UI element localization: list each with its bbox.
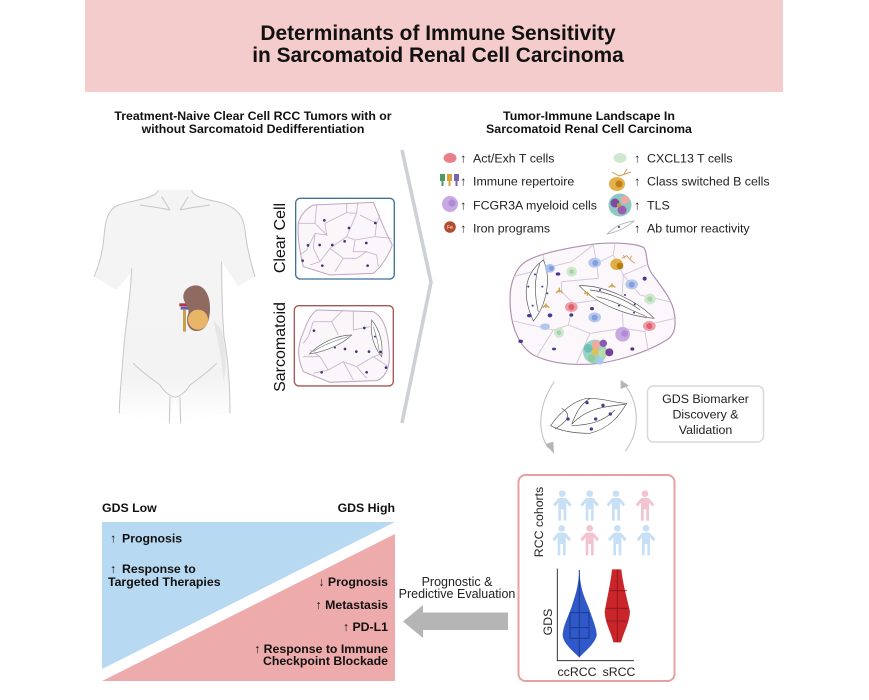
legend item: Ab tumor reactivity: ↑ [634,222,640,236]
legend item: Ab tumor reactivity [607,221,750,236]
legend item: TLS: TLS [647,198,670,212]
legend item: Act/Exh T cells: ↑ [460,152,466,166]
violin plot [557,569,634,661]
label: prognostic and predictive evaluation: Prognostic & [422,575,493,589]
legend: tumor-immune features [440,152,770,236]
spindle cells [526,260,654,321]
wedge: GDS high: ↓ Prognosis [318,575,388,589]
tumor microenvironment illustration [510,243,675,365]
icon: human torso with kidney [94,190,255,423]
legend item: CXCL13 T cells: CXCL13 T cells [647,152,733,166]
wedge: GDS low [102,522,395,669]
legend item: Ab tumor reactivity: Ab tumor reactivity [647,222,750,236]
arrow: left down [541,382,554,454]
panel: sarcomatoid tumor: Sarcomatoid [272,302,289,392]
label: prognostic and predictive evaluation: Predictive Evaluation [399,587,515,601]
legend item: Iron programs: Iron programs [473,222,550,236]
spindle cell cluster [551,398,627,433]
cohort people icons [552,490,655,555]
callout: GDS biomarker discovery [648,386,764,442]
arrow: evaluation to outcomes [403,605,508,638]
chevron divider [402,150,431,423]
callout: GDS biomarker discovery: Discovery & [672,408,739,422]
TLS cluster [583,340,613,365]
wedge: GDS low: ↑ [110,562,116,576]
callout: GDS biomarker discovery: Validation [679,423,732,437]
heading: tumor-immune landscape [486,109,692,136]
legend item: FCGR3A myeloid cells [442,196,597,212]
label: prognostic and predictive evaluation [399,575,515,601]
panel: clear cell tumor [272,198,394,279]
heading: treatment-naive tumors [114,109,392,136]
wedge: GDS high: Checkpoint Blockade [263,654,388,668]
heading: treatment-naive tumors: without Sarcomatoid Dedifferentiation [141,122,364,136]
legend item: Class switched B cells: Class switched B cells [647,174,770,188]
title banner [85,0,783,92]
legend item: Class switched B cells [609,169,770,191]
panel: clear cell tumor: Clear Cell [272,203,289,273]
legend item: TLS: ↑ [634,198,640,212]
GDS low and high outcome wedge: GDS High [338,501,395,515]
wedge: GDS low: Targeted Therapies [108,575,221,589]
legend item: Immune repertoire: Immune repertoire [473,174,574,188]
wedge: GDS high: ↑ Metastasis [316,598,388,612]
cycle arrows and spindle cell cluster [541,380,636,454]
wedge: GDS low: ↑ [110,532,116,546]
title banner: in Sarcomatoid Renal Cell Carcinoma [252,44,624,67]
panel: RCC cohorts and GDS violin plot: ccRCC [558,665,597,679]
panel: RCC cohorts and GDS violin plot [518,475,674,681]
heading: tumor-immune landscape: Sarcomatoid Renal Cell Carcinoma [486,122,692,136]
GDS low and high outcome wedge [102,501,395,681]
panel: sarcomatoid tumor [272,302,393,392]
antibodies [543,283,615,308]
panel: RCC cohorts and GDS violin plot: RCC cohorts [532,487,546,557]
legend item: Act/Exh T cells: Act/Exh T cells [473,152,554,166]
panel: RCC cohorts and GDS violin plot: GDS [541,609,555,635]
legend item: TLS [608,194,670,216]
legend item: Iron programs: ↑ [460,222,466,236]
legend item: FCGR3A myeloid cells: FCGR3A myeloid cells [473,198,597,212]
legend item: Immune repertoire: ↑ [460,174,466,188]
kidney and tumor [179,285,210,332]
legend item: Class switched B cells: ↑ [634,174,640,188]
heading: treatment-naive tumors: Treatment-Naive Clear Cell RCC Tumors with or [114,109,392,123]
wedge: GDS high [102,534,395,681]
title banner: Determinants of Immune Sensitivity [260,22,616,45]
wedge: GDS high: ↑ Response to Immune [254,642,388,656]
heading: tumor-immune landscape: Tumor-Immune Landscape In [503,109,675,123]
wedge: GDS low: Prognosis [122,532,182,546]
wedge: GDS low: Response to [122,562,196,576]
immune cells [540,255,656,342]
legend item: Iron programs: Fe [447,225,453,231]
panel: RCC cohorts and GDS violin plot: sRCC [603,665,636,679]
GDS low and high outcome wedge: GDS Low [102,501,157,515]
callout: GDS biomarker discovery: GDS Biomarker [662,392,749,406]
wedge: GDS high: ↑ PD-L1 [343,620,388,634]
arrow: right up [621,380,636,451]
nuclei [518,272,647,351]
legend item: FCGR3A myeloid cells: ↑ [460,198,466,212]
legend item: CXCL13 T cells: ↑ [634,152,640,166]
